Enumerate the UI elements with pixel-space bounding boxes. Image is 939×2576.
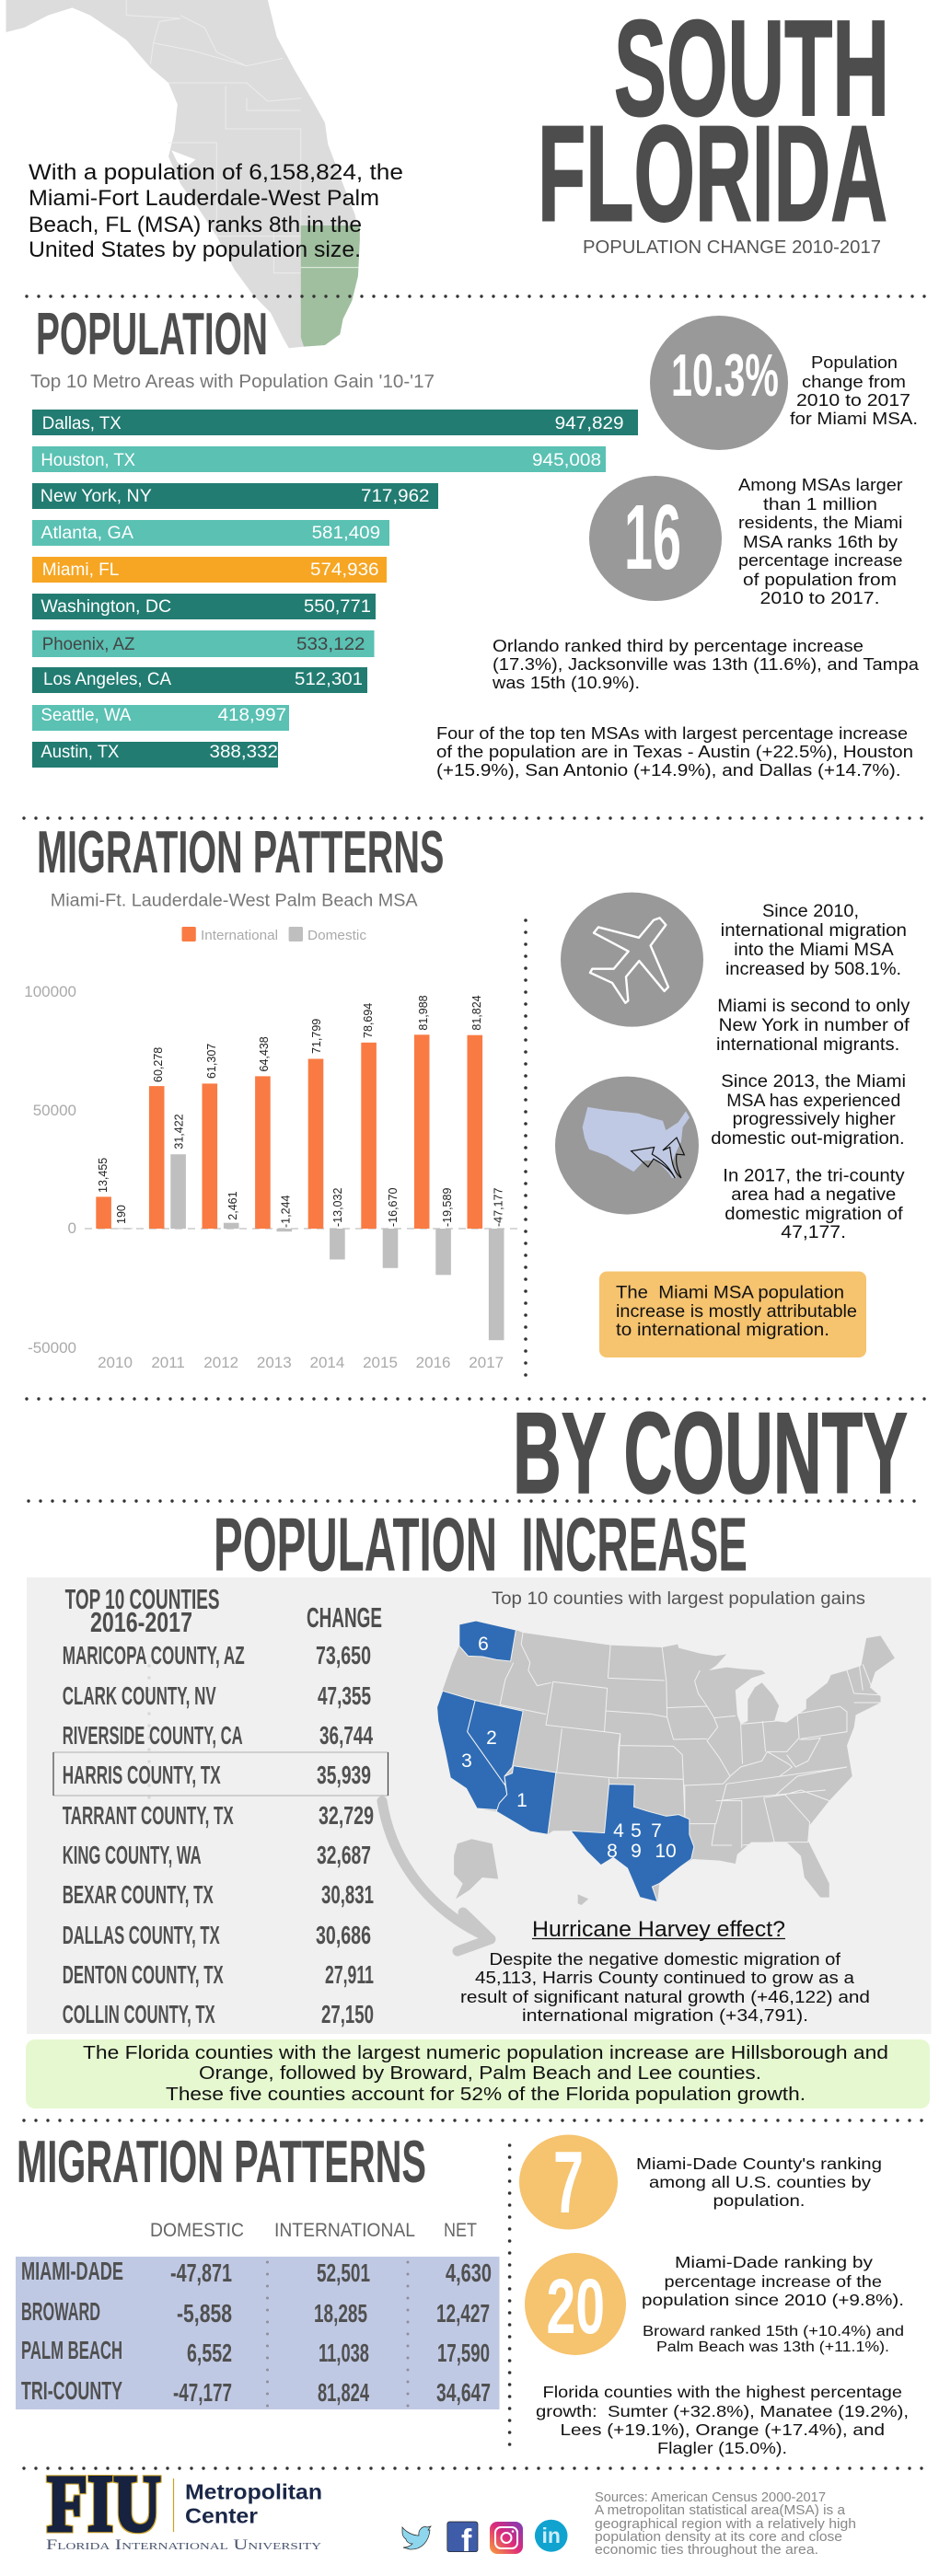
- callout: attributable to international migration: increase is mostly attributable: [616, 1302, 857, 1322]
- value labels: 78,694: [362, 1003, 375, 1038]
- table: top 10 counties rows: COLLIN COUNTY, TX: [63, 2000, 215, 2028]
- domestic bars: [118, 1154, 504, 1340]
- text: domestic out-migration: 47,177.: [781, 1223, 846, 1242]
- row: Tri-County: TRI-COUNTY: [21, 2376, 122, 2405]
- row: Miami-Dade: 52,501: [317, 2258, 370, 2287]
- text: Miami-Dade percentage rank: population since 2010 (+9.8%).: [642, 2291, 904, 2309]
- bar: Austin: Austin, TX: [41, 743, 120, 762]
- callout: rank 20 circle: 20: [547, 2263, 605, 2350]
- text: international migration: [716, 902, 910, 1055]
- table: top 10 counties rows: DALLAS COUNTY, TX: [63, 1921, 220, 1949]
- table heading: top 10 counties: TOP 10 COUNTIES: [65, 1583, 220, 1615]
- callout: Florida counties: Orange, followed by Broward, Palm Beach and Lee counties.: [199, 2062, 761, 2084]
- value labels: 190: [115, 1205, 128, 1224]
- callout: 10.3% circle: [650, 316, 788, 450]
- bar: Phoenix: Phoenix, AZ: [42, 635, 135, 654]
- table: top 10 counties rows: [63, 1641, 374, 2028]
- row: Tri-County: [21, 2376, 491, 2407]
- text: Texas MSAs: Four of the top ten MSAs with largest percentage increase: [436, 723, 908, 743]
- icon: US map with out-migration arrows in circle: [555, 1077, 699, 1215]
- chart legend: International: [201, 928, 278, 943]
- table: top 10 counties rows: CLARK COUNTY, NV: [63, 1681, 216, 1710]
- table: top 10 counties rows: DENTON COUNTY, TX: [63, 1960, 224, 1989]
- text: Florida counties highest growth: Flagler (15.0%).: [657, 2439, 787, 2457]
- value labels: 60,278: [152, 1047, 165, 1082]
- chart legend: [182, 927, 367, 943]
- text: Hurricane Harvey effect: result of significant natural growth (+46,122) and: [460, 1987, 870, 2006]
- icon: Facebook: [447, 2522, 478, 2559]
- text: sources and MSA definition: geographical region with a relatively high: [595, 2517, 856, 2532]
- text: domestic out-migration: domestic out-migration.: [711, 1129, 905, 1149]
- map rank numbers: 6: [478, 1634, 489, 1655]
- bar: New York: [32, 483, 438, 509]
- text: Miami-Dade national rank: [636, 2154, 882, 2210]
- value labels: 81,824: [470, 995, 483, 1031]
- intro text block: Miami-Fort Lauderdale-West Palm: [29, 186, 379, 211]
- map rank numbers: 7: [651, 1820, 662, 1842]
- text: Texas MSAs: of the population are in Texas - Austin (+22.5%), Houston: [436, 742, 913, 761]
- value labels: 31,422: [173, 1114, 186, 1149]
- text: Florida counties highest growth: [536, 2383, 909, 2457]
- x axis labels: 2014: [309, 1354, 344, 1371]
- intro text block: [29, 160, 403, 262]
- y axis labels: 50000: [33, 1102, 76, 1119]
- table: top 10 counties rows: 30,686: [316, 1921, 371, 1949]
- y axis labels: 0: [68, 1219, 76, 1237]
- row: Tri-County: 81,824: [318, 2378, 369, 2407]
- text: Miami-Dade national rank: among all U.S. counties by: [649, 2173, 871, 2191]
- value labels: 71,799: [310, 1019, 323, 1054]
- map rank numbers: 1: [516, 1790, 527, 1811]
- table: top 10 counties rows: 35,939: [317, 1761, 371, 1789]
- text: Miami-Dade percentage rank: Palm Beach was 13th (+11.1%).: [656, 2339, 889, 2355]
- bar: Austin: [32, 742, 278, 768]
- text: sources and MSA definition: A metropolitan statistical area(MSA) is a: [595, 2503, 846, 2518]
- text: Florida counties highest growth: growth: Sumter (+32.8%), Manatee (19.2%),: [536, 2402, 909, 2420]
- text: international migration: international migration: [721, 921, 907, 941]
- table: migration by county: [16, 2257, 499, 2409]
- text: sources and MSA definition: [595, 2490, 856, 2558]
- bar chart: international and domestic migration: [24, 983, 520, 1371]
- text: international migration: international migrants.: [716, 1035, 899, 1055]
- bar: Atlanta: 581,409: [312, 524, 380, 543]
- text: domestic out-migration: domestic migration of: [725, 1205, 903, 1224]
- bar: Phoenix: [32, 630, 374, 657]
- map rank numbers: 9: [631, 1841, 642, 1862]
- x axis labels: 2017: [469, 1354, 504, 1371]
- row: Palm Beach: 17,590: [437, 2339, 490, 2367]
- intro text block: United States by population size.: [29, 237, 361, 262]
- x axis labels: 2013: [257, 1354, 292, 1371]
- text: Miami-Dade percentage rank: percentage increase of the: [665, 2272, 882, 2291]
- bar: Seattle: 418,997: [218, 706, 286, 725]
- icon: LinkedIn: [535, 2520, 567, 2552]
- chart legend: Domestic: [307, 928, 367, 943]
- row: Broward: -5,858: [177, 2299, 232, 2328]
- text: Miami-Dade percentage rank: [642, 2253, 904, 2355]
- y axis labels: 100000: [24, 983, 76, 1000]
- text: Texas MSAs: (+15.9%), San Antonio (+14.9%), and Dallas (+14.7%).: [436, 760, 900, 780]
- bar: Washington: [32, 594, 376, 619]
- text: Miami-Dade percentage rank: Broward ranked 15th (+10.4%) and: [643, 2324, 904, 2339]
- table: top 10 counties rows: 73,650: [316, 1641, 371, 1669]
- logo: FIU Metropolitan Center: [46, 2459, 322, 2553]
- value labels: 64,438: [258, 1036, 271, 1071]
- x axis labels: [98, 1354, 504, 1371]
- bar: Atlanta: [32, 520, 389, 546]
- table header: DOMESTIC: [150, 2220, 244, 2241]
- map rank numbers: 2: [486, 1727, 497, 1749]
- text: international migration: Miami is second to only: [717, 997, 910, 1016]
- x axis labels: 2015: [363, 1354, 398, 1371]
- bar: New York: New York, NY: [41, 487, 152, 506]
- callout: rank 16 circle: 16: [624, 486, 681, 589]
- text: Miami-Dade national rank: Miami-Dade County's ranking: [636, 2154, 882, 2173]
- intro text block: Beach, FL (MSA) ranks 8th in the: [29, 213, 362, 237]
- map rank numbers: 8: [607, 1841, 618, 1862]
- text: rank among MSAs: [738, 475, 902, 607]
- text: Hurricane Harvey effect: international migration (+34,791).: [522, 2005, 808, 2025]
- map rank numbers: 5: [631, 1820, 642, 1842]
- table: top 10 counties rows: 27,150: [321, 2000, 374, 2028]
- table: top 10 counties rows: MARICOPA COUNTY, AZ: [63, 1641, 245, 1669]
- text: Orlando ranking: (17.3%), Jacksonville was 13th (11.6%), and Tampa: [493, 654, 920, 674]
- subtitle: POPULATION CHANGE 2010-2017: [583, 237, 881, 258]
- map rank numbers: 10: [655, 1841, 677, 1862]
- value labels: -19,589: [441, 1188, 454, 1227]
- text: domestic out-migration: area had a negative: [731, 1185, 896, 1205]
- table: top 10 counties rows: BEXAR COUNTY, TX: [63, 1880, 214, 1909]
- icon: Twitter: [402, 2526, 431, 2549]
- row: Miami-Dade: [21, 2257, 492, 2287]
- value labels: -47,177: [493, 1188, 505, 1227]
- icon: LinkedIn: in: [541, 2524, 561, 2547]
- row: Miami-Dade: 4,630: [446, 2258, 492, 2287]
- text: Orlando ranking: [492, 636, 920, 692]
- text: rank among MSAs: 2010 to 2017.: [760, 588, 880, 607]
- row: Miami-Dade: MIAMI-DADE: [21, 2257, 123, 2285]
- table heading: top 10 counties: [65, 1583, 382, 1638]
- bar: Dallas: [32, 410, 638, 435]
- icon: airplane in circle: [561, 893, 703, 1027]
- logo: FIU Metropolitan Center: Metropolitan: [185, 2480, 322, 2504]
- text: rank among MSAs: MSA ranks 16th by: [743, 532, 898, 551]
- text: international migration: New York in number of: [719, 1016, 910, 1035]
- highlight box: Harris County: [53, 1752, 388, 1796]
- value labels: 61,307: [205, 1044, 218, 1079]
- bar: New York: 717,962: [361, 487, 429, 506]
- text: rank among MSAs: than 1 million: [763, 494, 877, 514]
- text: Hurricane Harvey effect: Hurricane Harvey effect?: [532, 1917, 785, 1942]
- bar: Houston: Houston, TX: [41, 451, 135, 470]
- bar: Miami: 574,936: [310, 560, 379, 580]
- bar: Dallas: 947,829: [555, 414, 624, 433]
- callout: attributable to international migration: The Miami MSA population: [616, 1283, 844, 1303]
- bar: Washington: 550,771: [304, 597, 371, 617]
- row: Palm Beach: 11,038: [319, 2339, 369, 2367]
- text: Orlando ranking: was 15th (10.9%).: [492, 673, 640, 692]
- table: top 10 counties rows: 36,744: [319, 1721, 373, 1750]
- text: Hurricane Harvey effect: Despite the negative domestic migration of: [490, 1949, 841, 1969]
- bar: Los Angeles: [32, 667, 367, 693]
- value labels: -1,244: [279, 1196, 292, 1228]
- bar: Austin: 388,332: [210, 743, 278, 762]
- text: rank among MSAs: of population from: [743, 570, 897, 589]
- bar: Miami: Miami, FL: [42, 560, 119, 580]
- row: Miami-Dade: -47,871: [170, 2258, 232, 2287]
- subheading: MSA name: Miami-Ft. Lauderdale-West Palm Beach MSA: [51, 891, 418, 911]
- table: top 10 counties rows: 32,729: [319, 1801, 374, 1830]
- text: domestic out-migration: [711, 1072, 906, 1242]
- text: Hurricane Harvey effect: [460, 1917, 870, 2025]
- table: top 10 counties rows: 32,687: [317, 1841, 371, 1869]
- table: top 10 counties rows: KING COUNTY, WA: [63, 1841, 202, 1869]
- bar: Houston: 945,008: [532, 451, 601, 470]
- text: population change: change from: [802, 372, 906, 391]
- row: Broward: 12,427: [436, 2299, 490, 2328]
- icon: Facebook: f: [461, 2524, 472, 2559]
- international bars: [96, 1034, 482, 1229]
- heading: Migration Patterns by county: MIGRATION PATTERNS: [17, 2128, 426, 2195]
- value labels: [97, 995, 505, 1228]
- text: sources and MSA definition: Sources: American Census 2000-2017: [595, 2490, 826, 2505]
- text: rank among MSAs: Among MSAs larger: [738, 475, 902, 494]
- x axis labels: 2016: [416, 1354, 451, 1371]
- text: Hurricane Harvey effect: 45,113, Harris County continued to grow as a: [475, 1968, 855, 1987]
- heading: Migration Patterns: MIGRATION PATTERNS: [37, 818, 444, 885]
- value labels: -13,032: [331, 1188, 344, 1227]
- icon: Instagram: [490, 2522, 523, 2554]
- y axis labels: -50000: [28, 1339, 76, 1357]
- y axis labels: [24, 983, 76, 1357]
- map caption: Top 10 counties with largest population gains: [492, 1589, 865, 1609]
- bar: Washington: Washington, DC: [41, 597, 171, 617]
- text: Orlando ranking: Orlando ranked third by percentage increase: [493, 636, 864, 655]
- bar chart: top 10 metro areas: [32, 410, 638, 768]
- row: Broward: BROWARD: [21, 2297, 100, 2326]
- text: Texas MSAs: [436, 723, 913, 780]
- callout: rank 20 circle: [525, 2253, 626, 2355]
- bar: Atlanta: Atlanta, GA: [41, 524, 133, 543]
- value labels: 81,988: [417, 995, 430, 1031]
- logo: FIU Metropolitan Center: FIU: [47, 2459, 161, 2549]
- title: South Florida: [538, 0, 889, 250]
- logo: FIU Metropolitan Center: Center: [185, 2504, 258, 2528]
- table heading: top 10 counties: 2016-2017: [90, 1606, 192, 1638]
- table header: [150, 2220, 477, 2241]
- row: Broward: [21, 2297, 490, 2328]
- text: domestic out-migration: MSA has experienced: [726, 1092, 900, 1111]
- text: sources and MSA definition: economic ties throughout the area.: [595, 2543, 818, 2558]
- arrow: Harris County to Hurricane Harvey note: [382, 1801, 491, 1951]
- value labels: -16,670: [387, 1188, 400, 1227]
- x axis labels: 2012: [203, 1354, 238, 1371]
- logo: FIU Metropolitan Center: Florida International University: [46, 2537, 321, 2553]
- callout: rank 7 circle: 7: [553, 2133, 584, 2232]
- text: population change: 2010 to 2017: [796, 390, 910, 410]
- text: international migration: increased by 508.1%.: [725, 960, 901, 979]
- map rank numbers: 4: [613, 1820, 624, 1842]
- table: top 10 counties rows: TARRANT COUNTY, TX: [63, 1801, 234, 1830]
- table heading: top 10 counties: CHANGE: [307, 1601, 382, 1634]
- row: Broward: 18,285: [314, 2299, 367, 2328]
- bar: Dallas: Dallas, TX: [42, 414, 122, 433]
- text: Florida counties highest growth: Florida counties with the highest percentage: [543, 2383, 902, 2401]
- bar: Seattle: Seattle, WA: [41, 706, 132, 725]
- table: top 10 counties rows: RIVERSIDE COUNTY, CA: [63, 1721, 243, 1750]
- text: Miami-Dade national rank: population.: [713, 2191, 805, 2210]
- text: domestic out-migration: In 2017, the tri-county: [723, 1167, 905, 1185]
- bar: Los Angeles: Los Angeles, CA: [43, 670, 171, 689]
- map: United States with highlighted states: [437, 1621, 895, 1905]
- callout: rank 16 circle: [589, 476, 722, 601]
- map rank numbers: [461, 1634, 677, 1862]
- row: Palm Beach: [21, 2336, 490, 2367]
- text: international migration: into the Miami MSA: [734, 941, 894, 960]
- callout: Florida counties: [26, 2039, 930, 2108]
- table header: INTERNATIONAL: [274, 2220, 415, 2241]
- row: Palm Beach: 6,552: [187, 2339, 232, 2367]
- table: top 10 counties rows: 27,911: [325, 1960, 374, 1989]
- bar: Los Angeles: 512,301: [295, 670, 363, 689]
- text: population change: [790, 352, 918, 428]
- bar: Seattle: [32, 705, 289, 731]
- text: sources and MSA definition: population density at its core and close: [595, 2530, 842, 2545]
- bar: Houston: [32, 446, 606, 472]
- callout: attributable to international migration: [599, 1272, 866, 1357]
- panel: county population increase: [27, 1577, 932, 2034]
- subheading: top 10 metro areas: Top 10 Metro Areas with Population Gain '10-'17: [30, 372, 435, 392]
- row: Tri-County: -47,177: [173, 2378, 232, 2407]
- text: international migration: Since 2010,: [762, 902, 859, 921]
- callout: Florida counties: The Florida counties with the largest numeric population increase are Hillsborough and: [83, 2042, 888, 2063]
- bar: Phoenix: 533,122: [296, 635, 365, 654]
- text: rank among MSAs: percentage increase: [738, 550, 902, 570]
- text: Miami-Dade percentage rank: Miami-Dade ranking by: [675, 2253, 873, 2271]
- map: Florida with Miami MSA highlighted: [6, 0, 360, 348]
- text: population change: Population: [811, 352, 898, 372]
- text: population change: for Miami MSA.: [790, 409, 918, 428]
- x axis labels: 2011: [151, 1354, 185, 1371]
- x axis labels: 2010: [98, 1354, 133, 1371]
- callout: attributable to international migration: to international migration.: [616, 1321, 829, 1340]
- text: domestic out-migration: Since 2013, the Miami: [721, 1072, 906, 1092]
- table: top 10 counties rows: 47,355: [318, 1681, 371, 1710]
- value labels: 13,455: [97, 1158, 110, 1193]
- intro text block: With a population of 6,158,824, the: [29, 160, 403, 185]
- table: top 10 counties rows: 30,831: [321, 1880, 374, 1909]
- map rank numbers: 3: [461, 1750, 472, 1772]
- bar: Miami: [32, 557, 387, 583]
- callout: 10.3% circle: 10.3%: [671, 341, 779, 409]
- table header: NET: [444, 2220, 477, 2241]
- callout: Florida counties: These five counties account for 52% of the Florida population growth.: [166, 2084, 806, 2105]
- text: rank among MSAs: residents, the Miami: [738, 513, 902, 532]
- text: domestic out-migration: progressively higher: [733, 1110, 896, 1129]
- table: top 10 counties rows: HARRIS COUNTY, TX: [63, 1761, 221, 1789]
- text: Florida counties highest growth: Lees (+19.1%), Orange (+17.4%), and: [560, 2420, 885, 2439]
- value labels: 2,461: [226, 1191, 239, 1220]
- row: Palm Beach: PALM BEACH: [21, 2336, 122, 2364]
- callout: rank 7 circle: [519, 2133, 618, 2232]
- heading: Population: POPULATION: [36, 300, 268, 367]
- row: Tri-County: 34,647: [436, 2378, 491, 2407]
